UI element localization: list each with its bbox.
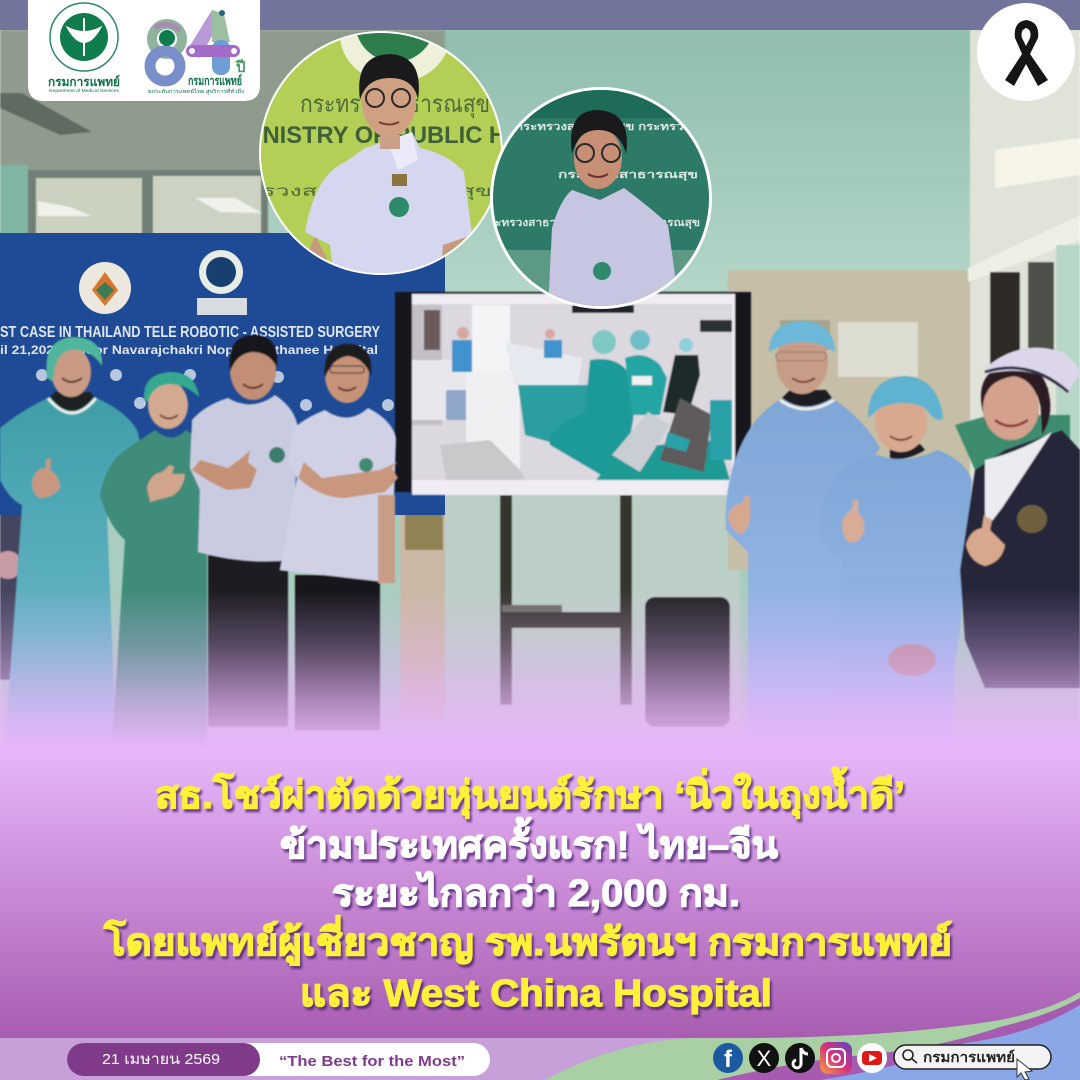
logo: Ministry of Public Health: [50, 3, 118, 71]
banner logo left: [79, 262, 131, 314]
icon: facebook: [713, 1043, 743, 1073]
headline line 4: โดยแพทย์ผู้เชี่ยวชาญ รพ.นพรัตนฯ กรมการแพทย์: [103, 915, 952, 966]
person 2: green gown: [100, 372, 207, 745]
banner date line: il 21,2026 6 floor Navarajchakri Nopparajathanee Hospital: [0, 345, 378, 357]
skin arms: [310, 235, 468, 263]
date and slogan pill: [67, 1043, 490, 1076]
person 1: teal gown: [0, 337, 140, 745]
instrument tray: [612, 412, 670, 472]
logo text Thai: กรมการแพทย์: [48, 74, 120, 89]
logo 84 caption: กรมการแพทย์: [188, 74, 242, 88]
icon: YouTube: [857, 1043, 887, 1073]
surgeon in teal gown: [549, 330, 634, 478]
backdrop Thai text top: กระทรวงสาธารณสุข กระทรวง: [515, 122, 690, 133]
green staff behind: [955, 415, 1070, 470]
headline line 5: และ West China Hospital: [300, 973, 772, 1015]
monitor showing remote surgery: [395, 292, 751, 495]
photo: background room: [0, 0, 1080, 760]
banner logo right: [197, 250, 247, 315]
backdrop small text: รวงสาธารณสุข ณสุข: [262, 183, 492, 201]
blue backdrop banner: [0, 233, 445, 515]
backdrop English text: INISTRY OF PUBLIC H: [256, 122, 506, 149]
purple text panel: [0, 749, 1080, 1040]
logo: 84 years: [150, 10, 240, 81]
people: surgical team: [0, 321, 1080, 745]
instrument case: [660, 398, 712, 472]
logo text English: Department of Medical Services: [49, 88, 120, 93]
date: 21 เมษายน 2569: [102, 1051, 220, 1068]
icon: magnifier: [903, 1050, 917, 1063]
slogan: “The Best for the Most”: [279, 1053, 465, 1070]
person 7: nurse in navy jacket: [960, 348, 1080, 688]
inset portrait 2: [490, 87, 712, 310]
icon: X: [749, 1043, 779, 1073]
top header band: [0, 0, 1080, 30]
backdrop Thai text lower: ะทรวงสาธารณสุข กระทรวงสาธารณสุข: [495, 218, 700, 229]
person 4: official in shirt: [280, 344, 398, 730]
banner title: ST CASE IN THAILAND TELE ROBOTIC - ASSISTED SURGERY: [0, 324, 381, 341]
mourning ribbon badge: [977, 3, 1075, 101]
person 5: blue gown: [726, 321, 880, 745]
headline line 2: ข้ามประเทศครั้งแรก! ไทย–จีน: [280, 817, 778, 867]
gradient fade over photo: [0, 590, 1080, 750]
search box: [894, 1045, 1051, 1080]
assistant in teal: [625, 330, 667, 415]
headline: [103, 767, 952, 1015]
person 6: blue gown: [818, 376, 972, 745]
social icons: [713, 1042, 887, 1074]
staff in blue: [452, 327, 472, 372]
inset portrait 1: [259, 31, 503, 275]
logo 84 year mark: ปี: [235, 59, 246, 76]
nurse in black: [663, 338, 700, 415]
search text: กรมการแพทย์: [923, 1049, 1015, 1065]
headline line 1: สธ.โชว์ผ่าตัดด้วยหุ่นยนต์รักษา ‘นิ่วในถุงน้ำดี’: [155, 767, 905, 819]
headline line 3: ระยะไกลกว่า 2,000 กม.: [332, 871, 740, 915]
icon: Instagram: [820, 1042, 852, 1074]
backdrop Thai text middle: กระทรวงสาธารณสุข: [558, 170, 698, 181]
icon: X: X: [757, 1046, 772, 1071]
icon: cursor: [1017, 1059, 1032, 1080]
shirt: [305, 132, 472, 285]
footer band: [0, 992, 1080, 1080]
logo 84 tagline: ยกระดับการแพทย์ไทย สู่บริการที่ทั่วถึง: [148, 88, 245, 95]
logo card: [28, 0, 260, 101]
icon: facebook: f: [724, 1046, 733, 1073]
person 3: official in shirt: [190, 335, 298, 727]
backdrop Thai text: กระทรวงสาธารณสุข: [300, 91, 490, 119]
icon: TikTok: [785, 1043, 815, 1073]
